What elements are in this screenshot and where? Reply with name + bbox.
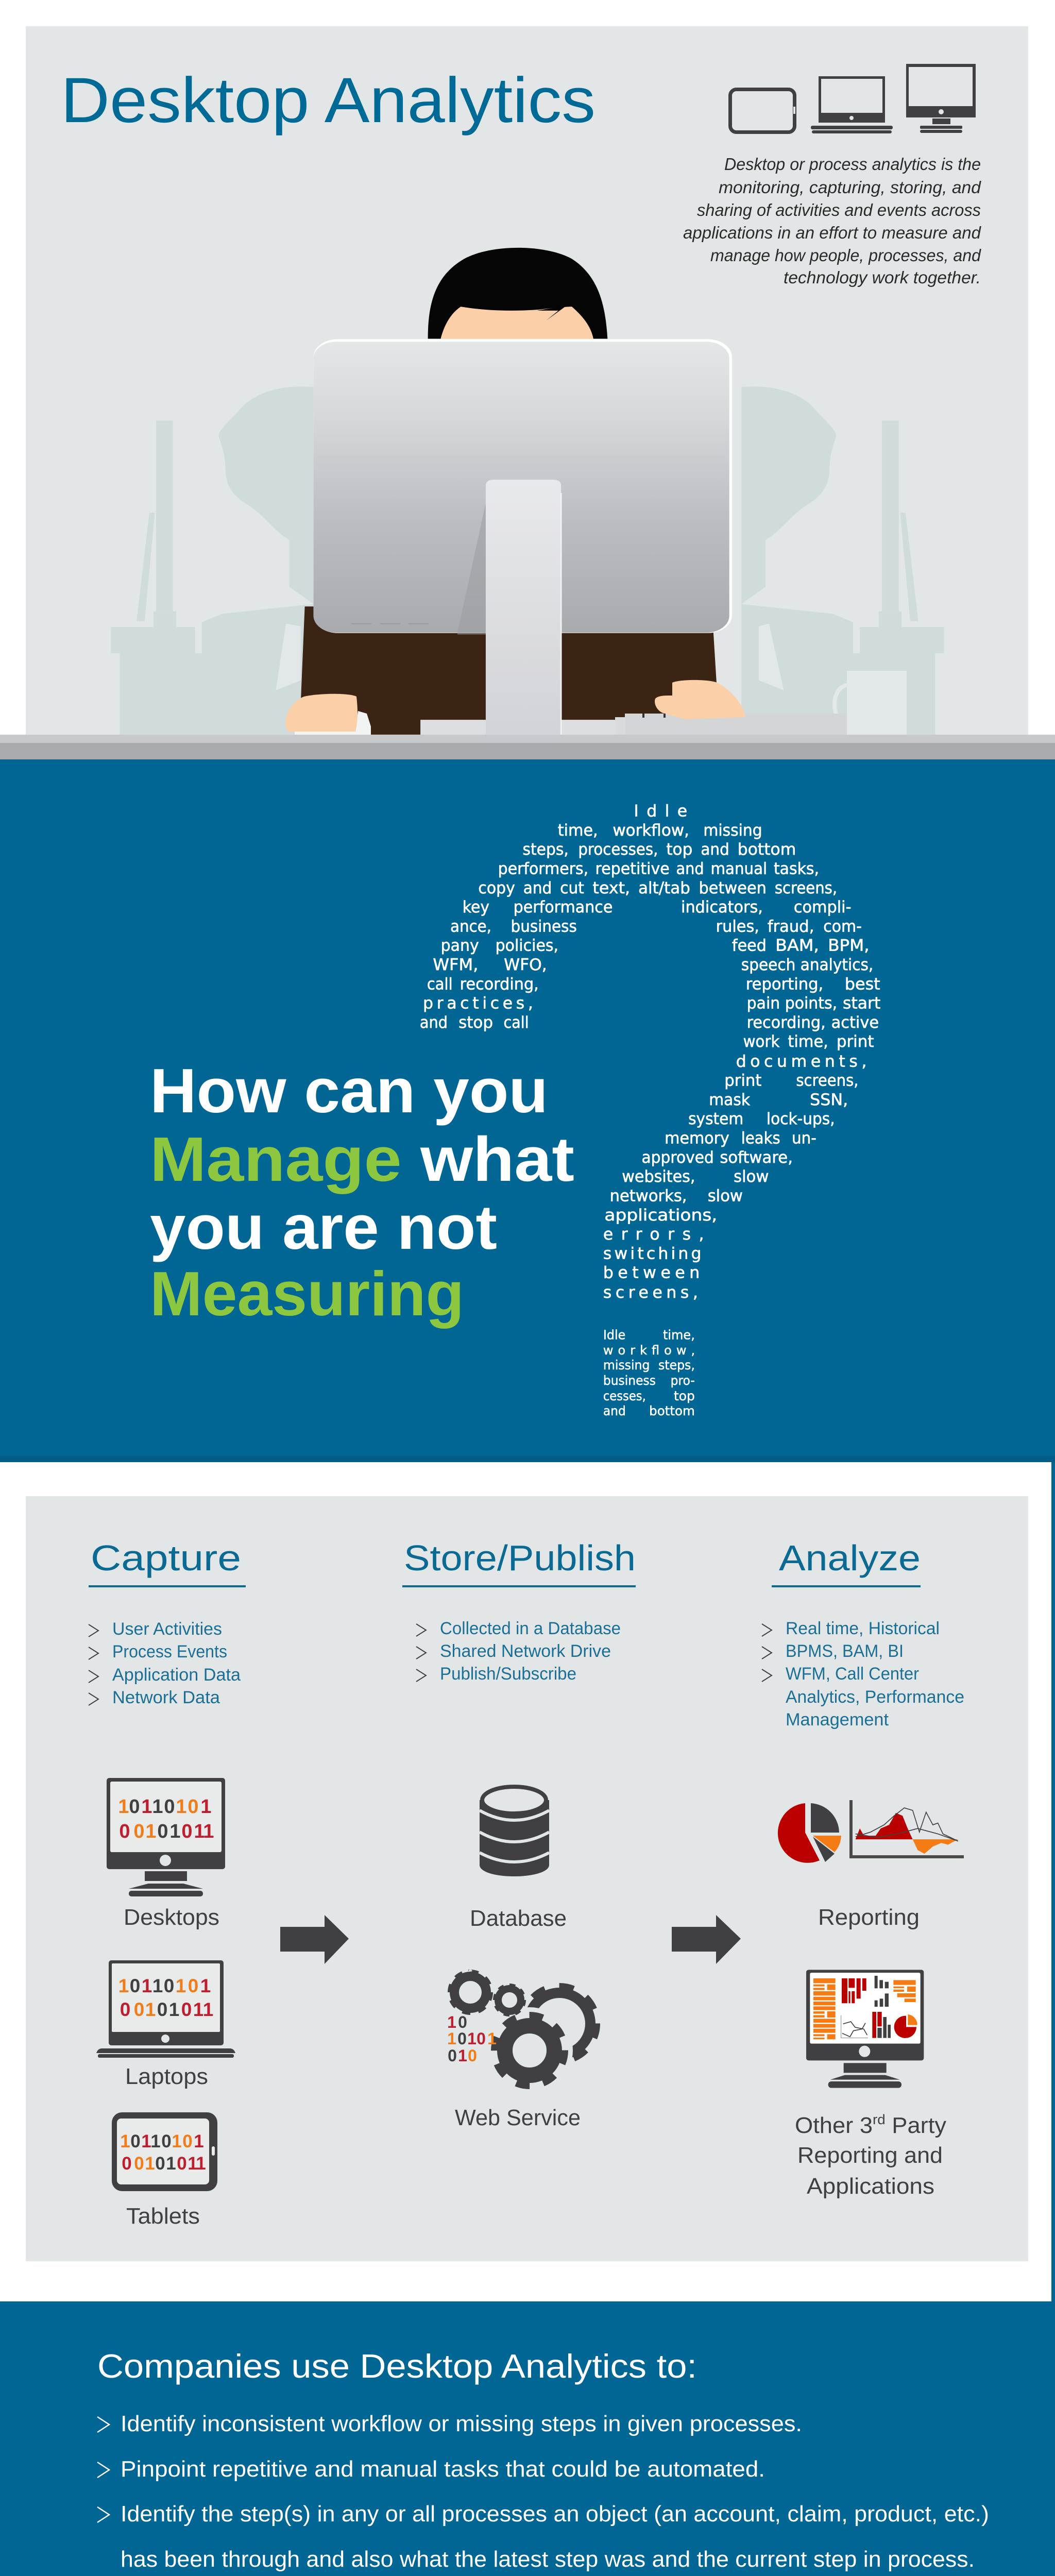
question mark word art: and bbox=[523, 878, 552, 897]
question mark word art: time, bbox=[663, 1328, 695, 1343]
icon: laptop: 1 bbox=[200, 1975, 211, 1996]
illustration: keyboard bbox=[615, 714, 847, 735]
illustration: hands and mouse bbox=[260, 680, 745, 740]
list: store/publish items: Collected in a Database bbox=[440, 1619, 621, 1638]
icon: tablet: 1 bbox=[188, 2154, 198, 2174]
column: store/publish heading: Store/Publish bbox=[404, 1538, 636, 1578]
list: capture items bbox=[89, 1619, 241, 1707]
label: other 3rd party reporting and applications: Applications bbox=[807, 2174, 934, 2199]
question mark word art: reporting, bbox=[746, 974, 823, 993]
label: reporting: Reporting bbox=[818, 1905, 920, 1930]
question mark word art: approved bbox=[641, 1148, 714, 1167]
question mark word art: WFM, bbox=[433, 955, 478, 974]
panel: question mark band bbox=[0, 759, 1055, 1462]
question mark word art: com- bbox=[823, 917, 862, 936]
arrow: store to analyze bbox=[672, 1915, 741, 1964]
question mark word art: mask bbox=[709, 1090, 751, 1109]
icon: gears and binary: 1 bbox=[467, 2029, 477, 2048]
intro text: monitoring, capturing, storing, and bbox=[719, 178, 982, 197]
question mark word art: workflow, bbox=[612, 821, 689, 840]
question mark word art: speech analytics, bbox=[741, 955, 873, 974]
icon: desktop: 0 bbox=[164, 1796, 175, 1818]
column: analyze heading: Analyze bbox=[779, 1538, 921, 1578]
question mark word art: start bbox=[843, 993, 880, 1012]
heading: how can you manage: you are not bbox=[150, 1192, 497, 1262]
question mark letter-spaced words: switching bbox=[603, 1244, 702, 1263]
question mark word art: applications, bbox=[604, 1206, 717, 1225]
icon: gears and binary: 0 bbox=[457, 2029, 467, 2048]
question mark word art: time, bbox=[788, 1032, 828, 1051]
bullet list: Identify inconsistent workflow or missing steps in given processes. bbox=[121, 2411, 802, 2436]
question mark word art: policies, bbox=[496, 936, 558, 955]
icon: monitor bbox=[906, 64, 976, 133]
list: store/publish items bbox=[416, 1619, 621, 1684]
question mark word art: time, bbox=[558, 821, 598, 840]
icon: gears and binary: 0 bbox=[468, 2046, 477, 2065]
question mark word art: top bbox=[666, 840, 692, 859]
intro text: sharing of activities and events across bbox=[697, 200, 981, 219]
icon: tablet: 1 bbox=[120, 2131, 130, 2151]
question mark letter-spaced words: between bbox=[603, 1264, 700, 1282]
question mark letter-spaced words: errors, bbox=[603, 1225, 704, 1244]
question mark word art: WFO, bbox=[504, 955, 547, 974]
icon: tablet: 0 bbox=[130, 2131, 141, 2151]
icon: tablet: 1 bbox=[145, 2154, 155, 2174]
icon: gears and binary: 0 bbox=[458, 2013, 467, 2031]
icon: desktop: 1 bbox=[203, 1821, 214, 1842]
icon: desktop: 1 bbox=[169, 1821, 181, 1842]
icon: desktop: 0 bbox=[119, 1821, 130, 1842]
question mark word art: performers, bbox=[498, 859, 588, 878]
icon: desktop: 0 bbox=[188, 1796, 199, 1818]
question mark word art: networks, bbox=[610, 1186, 687, 1205]
arrow: capture to store bbox=[280, 1915, 349, 1964]
list: store/publish items: Publish/Subscribe bbox=[440, 1664, 576, 1684]
question mark letter-spaced words: workflow, bbox=[603, 1343, 695, 1358]
label: other 3rd party reporting and applications: Reporting and bbox=[797, 2143, 943, 2168]
question mark word art: copy bbox=[478, 878, 515, 897]
bullet list: Pinpoint repetitive and manual tasks that could be automated. bbox=[121, 2456, 765, 2482]
question mark word art: and bbox=[420, 1013, 448, 1032]
question mark word art: business bbox=[603, 1374, 656, 1388]
question mark word art: print bbox=[837, 1032, 874, 1051]
question mark word art: recording, bbox=[747, 1013, 826, 1032]
icon: laptop: 0 bbox=[164, 1975, 174, 1996]
question mark word art: steps, bbox=[523, 840, 569, 859]
question mark word art: and bbox=[701, 840, 729, 859]
icon: laptop: 1 bbox=[142, 1975, 152, 1996]
icon: tablet: 1 bbox=[141, 2131, 151, 2151]
icon: gears and binary: 1 bbox=[447, 2013, 456, 2031]
icon: desktop: 1 bbox=[200, 1796, 212, 1818]
question mark word art: compli- bbox=[794, 897, 852, 917]
question mark word art: top bbox=[674, 1388, 695, 1404]
question mark word art: key bbox=[463, 897, 489, 917]
label: web service: Web Service bbox=[455, 2105, 581, 2130]
question mark word art: bottom bbox=[738, 840, 796, 859]
question mark word art: repetitive bbox=[595, 859, 670, 878]
question mark word art: indicators, bbox=[681, 897, 763, 917]
question mark word art: websites, bbox=[622, 1167, 695, 1186]
icon: desktop: 0 bbox=[133, 1821, 145, 1842]
icon: desktop: 0 bbox=[129, 1796, 140, 1818]
icon: tablet: 0 bbox=[134, 2154, 144, 2174]
question mark word art: manual bbox=[710, 859, 767, 878]
question mark word art: system bbox=[688, 1109, 743, 1128]
panel: companies use bbox=[0, 2301, 1055, 2576]
icon: reporting charts bbox=[778, 1800, 964, 1863]
icon: laptop: 1 bbox=[176, 1975, 186, 1996]
question mark word art: text, bbox=[592, 878, 630, 897]
question mark word art: missing bbox=[603, 1358, 650, 1373]
question mark word art: un- bbox=[792, 1128, 816, 1147]
icon: gears and binary: 1 bbox=[458, 2046, 467, 2065]
panel: capture store analyze bbox=[26, 1496, 1028, 2261]
question mark letter-spaced words bbox=[423, 802, 866, 1358]
question mark word art: and bbox=[603, 1403, 626, 1419]
list: analyze items: Management bbox=[786, 1710, 889, 1730]
icon: tablet: 1 bbox=[166, 2154, 176, 2174]
bullet list bbox=[121, 2411, 989, 2576]
question mark word art: pany bbox=[441, 936, 479, 955]
question mark word art: business bbox=[511, 917, 577, 936]
question mark word art: missing bbox=[703, 821, 762, 840]
illustration: person bbox=[299, 248, 719, 735]
icon: tablet: 0 bbox=[155, 2154, 165, 2174]
question mark word art: pain points, bbox=[747, 993, 837, 1012]
question mark word art: steps, bbox=[658, 1358, 695, 1373]
column: capture heading bbox=[89, 1538, 246, 1587]
question mark word art: between bbox=[699, 878, 767, 897]
intro text: Desktop or process analytics is the bbox=[724, 155, 981, 174]
question mark word art: BPM, bbox=[828, 936, 870, 955]
icon: desktop: 1 bbox=[141, 1796, 152, 1818]
question mark word art: screens, bbox=[775, 878, 837, 897]
question mark word art: cut bbox=[560, 878, 584, 897]
icon: tablet: 0 bbox=[177, 2154, 187, 2174]
question mark word art: slow bbox=[734, 1167, 769, 1186]
question mark letter-spaced words: documents, bbox=[736, 1052, 866, 1071]
illustration: mug bbox=[835, 671, 907, 736]
icon: laptop: 0 bbox=[120, 1999, 130, 2020]
label: laptops: Laptops bbox=[125, 2064, 208, 2089]
heading: how can you manage: Manage what bbox=[150, 1124, 574, 1194]
icon: desktop: 0 bbox=[181, 1821, 193, 1842]
heading: how can you manage bbox=[150, 1056, 574, 1329]
icon: tablet: 0 bbox=[122, 2154, 132, 2174]
label: desktops: Desktops bbox=[124, 1905, 219, 1930]
icon: laptop: 1 bbox=[169, 1999, 179, 2020]
question mark word art: stop bbox=[458, 1013, 493, 1032]
heading: Companies use Desktop Analytics to: bbox=[97, 2347, 697, 2385]
illustration: background silhouettes bbox=[111, 386, 944, 735]
question mark word art: tasks, bbox=[774, 859, 819, 878]
question mark word art: software, bbox=[720, 1148, 793, 1167]
question mark word art: rules, bbox=[716, 917, 759, 936]
bullet list: Identify the step(s) in any or all processes an object (an account, claim, product, etc.) bbox=[121, 2501, 989, 2527]
list: analyze items: BPMS, BAM, BI bbox=[786, 1641, 904, 1661]
question mark word art: and bbox=[676, 859, 704, 878]
icon: desktop: 0 bbox=[157, 1821, 168, 1842]
question mark word art: BAM, bbox=[775, 936, 819, 955]
icon: laptop bbox=[96, 1960, 235, 2058]
question mark word art: memory bbox=[665, 1128, 729, 1147]
icon: tablet bbox=[112, 2112, 217, 2191]
label: database: Database bbox=[470, 1906, 567, 1931]
icon: database bbox=[480, 1787, 549, 1876]
question mark word art: SSN, bbox=[810, 1090, 848, 1109]
question mark word art bbox=[420, 821, 880, 1419]
question mark letter-spaced words: screens, bbox=[603, 1283, 698, 1302]
panel: header bbox=[0, 26, 1055, 759]
label: other 3rd party reporting and applications: Other 3 bbox=[795, 2113, 871, 2138]
intro text: manage how people, processes, and bbox=[710, 246, 982, 265]
heading: how can you manage: Measuring bbox=[150, 1259, 464, 1329]
intro text: technology work together. bbox=[784, 268, 981, 287]
bullet chevrons bbox=[97, 2417, 109, 2576]
label: other 3rd party reporting and applications bbox=[795, 2112, 946, 2199]
question mark word art: ance, bbox=[450, 917, 491, 936]
icon: tablet: 1 bbox=[172, 2131, 182, 2151]
desk shelf bbox=[0, 735, 1055, 759]
question mark word art: call bbox=[427, 974, 453, 993]
icon: laptop: 0 bbox=[157, 1999, 167, 2020]
list: capture items: Network Data bbox=[112, 1688, 220, 1707]
question mark word art: cesses, bbox=[603, 1388, 646, 1404]
icon: laptop: 1 bbox=[145, 1999, 156, 2020]
question mark word art: slow bbox=[708, 1186, 743, 1205]
heading: how can you manage: How can you bbox=[150, 1056, 548, 1126]
icon: desktop: 1 bbox=[194, 1821, 205, 1842]
question mark word art: pro- bbox=[671, 1374, 695, 1388]
illustration: monitor back bbox=[314, 339, 732, 735]
icon: dashboard monitor bbox=[806, 1970, 924, 2088]
list: analyze items bbox=[762, 1619, 964, 1730]
icon: laptop: 1 bbox=[193, 1999, 203, 2020]
question mark word art: leaks bbox=[741, 1128, 780, 1147]
list: store/publish items: Shared Network Drive bbox=[440, 1641, 611, 1661]
icon: laptop: 0 bbox=[130, 1975, 140, 1996]
icon: laptop: 1 bbox=[118, 1975, 129, 1996]
icon: laptop: 1 bbox=[203, 1999, 213, 2020]
icon: desktop: 1 bbox=[118, 1796, 129, 1818]
right edge blue line bbox=[1051, 1462, 1055, 2301]
question mark word art: performance bbox=[514, 897, 612, 917]
icon: tablet: 1 bbox=[196, 2154, 206, 2174]
question mark word art: bottom bbox=[649, 1403, 695, 1419]
icon: tablet: 0 bbox=[161, 2131, 172, 2151]
question mark word art: processes, bbox=[578, 840, 658, 859]
label: other 3rd party reporting and applications: Party bbox=[886, 2113, 946, 2138]
question mark letter-spaced words: Idle bbox=[634, 802, 687, 821]
label: other 3rd party reporting and applications: rd bbox=[873, 2112, 886, 2127]
icon: gears and binary: 1 bbox=[487, 2029, 497, 2048]
icon: laptop: 0 bbox=[188, 1975, 198, 1996]
question mark word art: recording, bbox=[460, 974, 539, 993]
list: analyze items: WFM, Call Center bbox=[786, 1664, 919, 1684]
question mark word art: feed bbox=[732, 936, 767, 955]
icon: gears and binary: 0 bbox=[448, 2046, 457, 2065]
list: capture items: User Activities bbox=[112, 1619, 222, 1639]
icon: tablet: 1 bbox=[194, 2131, 204, 2151]
icon: tablet: 0 bbox=[182, 2131, 193, 2151]
icon: tablet: 1 bbox=[150, 2131, 161, 2151]
icon: desktop: 1 bbox=[176, 1796, 187, 1818]
icon: laptop: 0 bbox=[181, 1999, 192, 2020]
list: analyze items: Analytics, Performance bbox=[786, 1687, 964, 1707]
icon: tablet bbox=[730, 90, 795, 132]
bullet list: has been through and also what the latest step was and the current step in process. bbox=[121, 2547, 975, 2572]
question mark letter-spaced words: practices, bbox=[423, 994, 533, 1013]
icon: desktop bbox=[107, 1778, 225, 1896]
title: Desktop Analytics bbox=[61, 65, 595, 136]
question mark word art: active bbox=[831, 1013, 879, 1032]
question mark word art: best bbox=[845, 974, 880, 993]
list: analyze items: Real time, Historical bbox=[786, 1619, 940, 1638]
column: capture heading: Capture bbox=[91, 1538, 241, 1578]
intro text: applications in an effort to measure and bbox=[683, 223, 982, 242]
question mark word art: work bbox=[743, 1032, 780, 1051]
question mark word art: alt/tab bbox=[638, 878, 690, 897]
icon: gears and binary: 0 bbox=[477, 2029, 486, 2048]
icon: laptop: 1 bbox=[152, 1975, 163, 1996]
icon: laptop bbox=[811, 76, 893, 133]
question mark word art: lock-ups, bbox=[767, 1109, 835, 1128]
label: tablets: Tablets bbox=[126, 2204, 200, 2229]
icon: gears and binary bbox=[447, 1972, 597, 2094]
question mark word art: Idle bbox=[603, 1328, 625, 1343]
icon: desktop: 1 bbox=[145, 1821, 157, 1842]
intro text bbox=[683, 155, 982, 287]
icon: laptop: 0 bbox=[134, 1999, 144, 2020]
list: capture items: Process Events bbox=[112, 1642, 227, 1662]
icon: gears and binary: 1 bbox=[447, 2029, 456, 2048]
icon: desktop: 1 bbox=[152, 1796, 163, 1818]
question mark word art: print bbox=[724, 1071, 761, 1090]
question mark word art: call bbox=[504, 1013, 529, 1032]
question mark word art: screens, bbox=[796, 1071, 859, 1090]
list: capture items: Application Data bbox=[112, 1665, 241, 1685]
question mark word art: fraud, bbox=[768, 917, 814, 936]
